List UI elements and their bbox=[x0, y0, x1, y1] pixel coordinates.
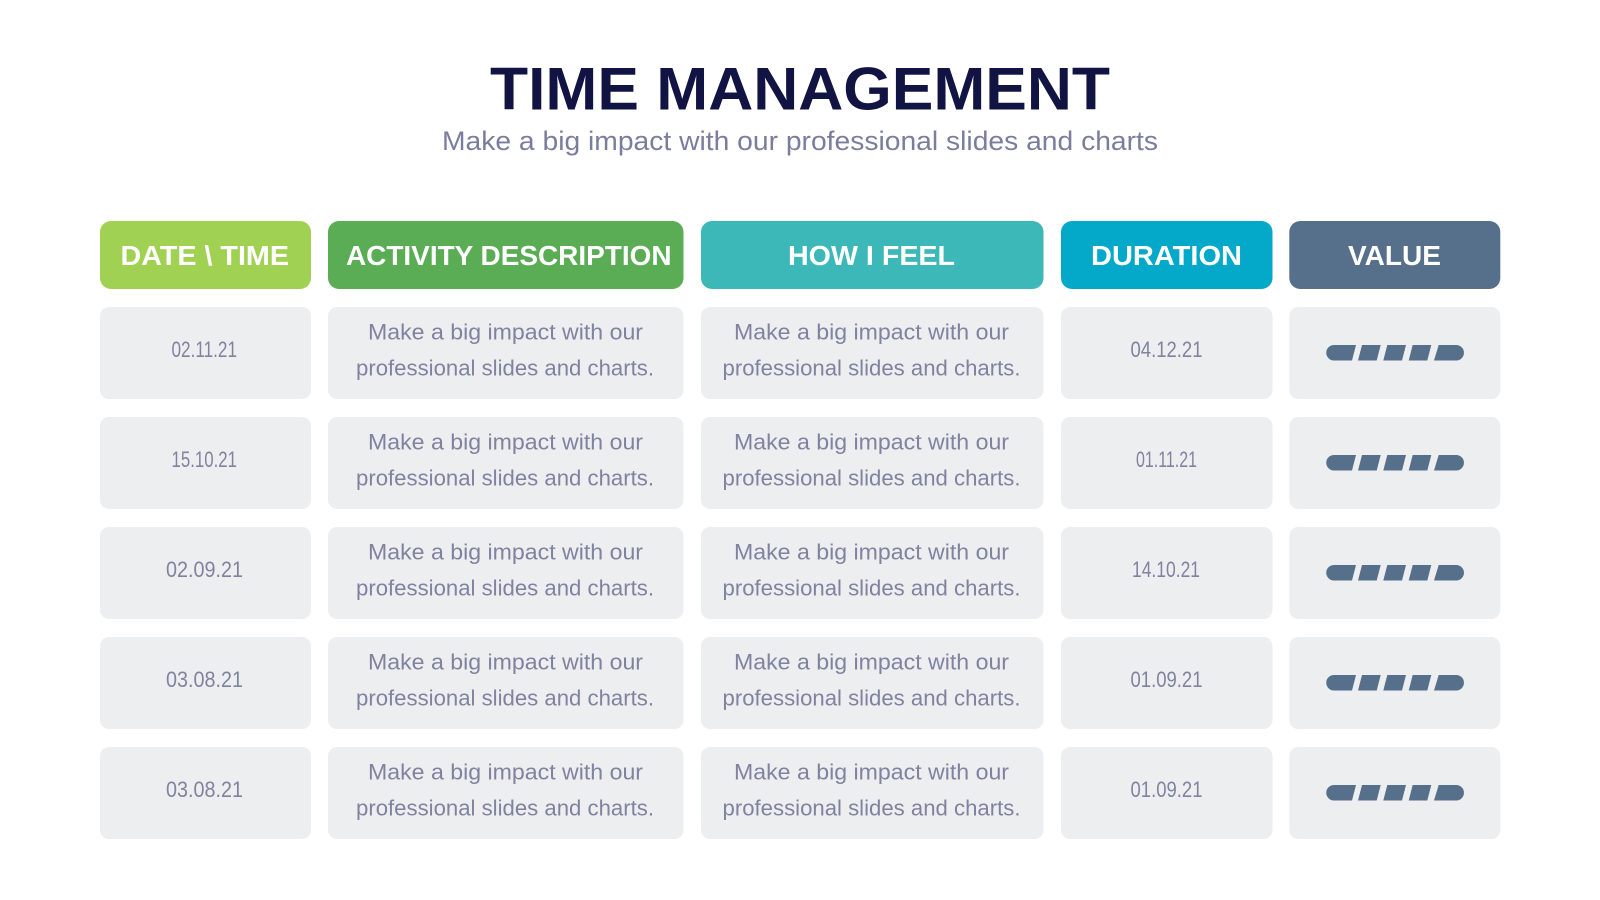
value cell bbox=[1289, 307, 1500, 399]
date cell: 03.08.21 bbox=[166, 777, 243, 802]
header: duration: DURATION bbox=[1091, 240, 1242, 271]
duration cell bbox=[1061, 307, 1272, 399]
activity cell bbox=[328, 747, 684, 839]
activity cell: professional slides and charts. bbox=[356, 356, 654, 380]
activity cell: Make a big impact with our bbox=[368, 650, 643, 674]
feeling cell: Make a big impact with our bbox=[734, 430, 1009, 454]
table row 1 bbox=[100, 307, 1500, 399]
duration cell bbox=[1061, 527, 1272, 619]
duration cell bbox=[1061, 747, 1272, 839]
feeling cell: professional slides and charts. bbox=[722, 576, 1020, 600]
table row 3 bbox=[100, 527, 1500, 619]
date cell bbox=[100, 417, 311, 509]
date cell: 02.09.21 bbox=[166, 557, 243, 582]
activity cell: Make a big impact with our bbox=[368, 430, 643, 454]
table row 4 bbox=[100, 637, 1500, 729]
header: activity description: ACTIVITY DESCRIPTION bbox=[346, 240, 672, 271]
title: TIME MANAGEMENT bbox=[490, 56, 1110, 122]
date cell bbox=[100, 527, 311, 619]
activity cell: professional slides and charts. bbox=[356, 686, 654, 710]
header: duration bbox=[1061, 221, 1272, 289]
activity cell: professional slides and charts. bbox=[356, 466, 654, 490]
activity cell: professional slides and charts. bbox=[356, 576, 654, 600]
duration cell bbox=[1061, 637, 1272, 729]
feeling cell bbox=[701, 307, 1044, 399]
activity cell bbox=[328, 527, 684, 619]
duration cell bbox=[1061, 417, 1272, 509]
activity cell bbox=[328, 637, 684, 729]
date cell bbox=[100, 307, 311, 399]
value cell bbox=[1289, 747, 1500, 839]
header: how i feel: HOW I FEEL bbox=[788, 240, 955, 271]
table header row bbox=[100, 221, 1500, 289]
header: date time bbox=[100, 221, 311, 289]
feeling cell: professional slides and charts. bbox=[722, 356, 1020, 380]
date cell bbox=[100, 637, 311, 729]
feeling cell: professional slides and charts. bbox=[722, 796, 1020, 820]
activity cell: Make a big impact with our bbox=[368, 320, 643, 344]
value cell bbox=[1289, 637, 1500, 729]
feeling cell bbox=[701, 527, 1044, 619]
activity cell: professional slides and charts. bbox=[356, 796, 654, 820]
header: value: VALUE bbox=[1348, 240, 1441, 271]
value cell bbox=[1289, 417, 1500, 509]
table row 2 bbox=[100, 417, 1500, 509]
duration cell: 01.09.21 bbox=[1130, 667, 1202, 692]
header: how i feel bbox=[701, 221, 1044, 289]
duration cell: 01.09.21 bbox=[1130, 777, 1202, 802]
feeling cell: Make a big impact with our bbox=[734, 540, 1009, 564]
activity cell bbox=[328, 307, 684, 399]
feeling cell: Make a big impact with our bbox=[734, 650, 1009, 674]
date cell: 02.11.21 bbox=[172, 337, 237, 362]
duration cell: 01.11.21 bbox=[1136, 447, 1197, 472]
date cell bbox=[100, 747, 311, 839]
table row 5 bbox=[100, 747, 1500, 839]
date cell: 15.10.21 bbox=[172, 447, 237, 472]
feeling cell bbox=[701, 637, 1044, 729]
feeling cell: professional slides and charts. bbox=[722, 466, 1020, 490]
feeling cell: professional slides and charts. bbox=[722, 686, 1020, 710]
duration cell: 14.10.21 bbox=[1132, 557, 1200, 582]
header: activity description bbox=[328, 221, 684, 289]
activity cell: Make a big impact with our bbox=[368, 540, 643, 564]
feeling cell: Make a big impact with our bbox=[734, 760, 1009, 784]
activity cell: Make a big impact with our bbox=[368, 760, 643, 784]
feeling cell bbox=[701, 747, 1044, 839]
date cell: 03.08.21 bbox=[166, 667, 243, 692]
subtitle: Make a big impact with our professional slides and charts bbox=[442, 126, 1158, 156]
header: date time: DATE \ TIME bbox=[120, 240, 289, 271]
feeling cell: Make a big impact with our bbox=[734, 320, 1009, 344]
duration cell: 04.12.21 bbox=[1130, 337, 1202, 362]
feeling cell bbox=[701, 417, 1044, 509]
value cell bbox=[1289, 527, 1500, 619]
header: value bbox=[1289, 221, 1500, 289]
activity cell bbox=[328, 417, 684, 509]
